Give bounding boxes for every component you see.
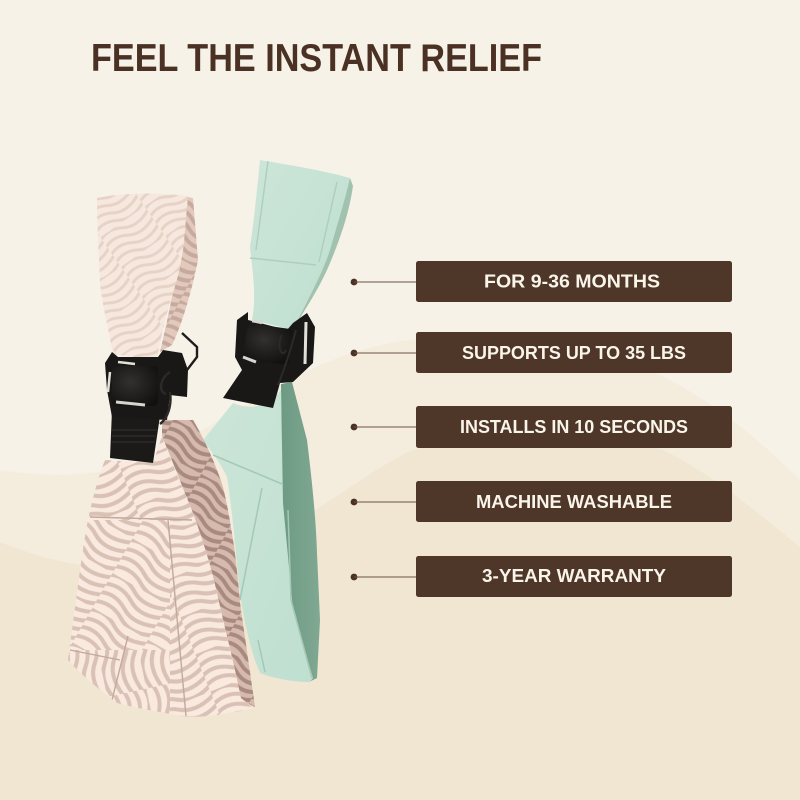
background wave: upper [0, 340, 800, 800]
label pill [416, 406, 732, 448]
label text: MACHINE WASHABLE [476, 492, 672, 512]
label pill [416, 556, 732, 597]
product: pink sling [60, 194, 260, 725]
feature callout: washable [351, 481, 732, 522]
label pill [416, 261, 732, 302]
mint lower front panel [203, 390, 313, 682]
mint lower back panel [281, 382, 320, 682]
connector [351, 574, 416, 580]
background wave: lower [0, 437, 800, 800]
pink upper strap [97, 194, 188, 360]
connector [351, 424, 416, 430]
connector [351, 279, 416, 285]
pink lower front panel [68, 436, 252, 717]
feature callout: install [351, 406, 732, 448]
feature callout: warranty [351, 556, 732, 597]
label text: INSTALLS IN 10 SECONDS [460, 417, 688, 437]
label pill [416, 332, 732, 373]
title: FEEL THE INSTANT RELIEF [91, 37, 542, 80]
black webbing strap [110, 410, 160, 463]
pink back panel, lower [162, 420, 255, 707]
connector [351, 499, 416, 505]
connector [351, 350, 416, 356]
mint upper strap [250, 160, 350, 330]
feature callout: ages [351, 261, 732, 302]
mint buckle [223, 312, 315, 408]
label text: SUPPORTS UP TO 35 LBS [462, 343, 686, 363]
label text: 3-YEAR WARRANTY [482, 566, 666, 586]
mint back panel [288, 178, 353, 326]
pink back panel, upper [160, 197, 198, 352]
feature callout: weight [351, 332, 732, 373]
product: mint sling [203, 160, 353, 682]
pink buckle [105, 333, 197, 463]
label text: FOR 9-36 MONTHS [484, 272, 660, 292]
label pill [416, 481, 732, 522]
